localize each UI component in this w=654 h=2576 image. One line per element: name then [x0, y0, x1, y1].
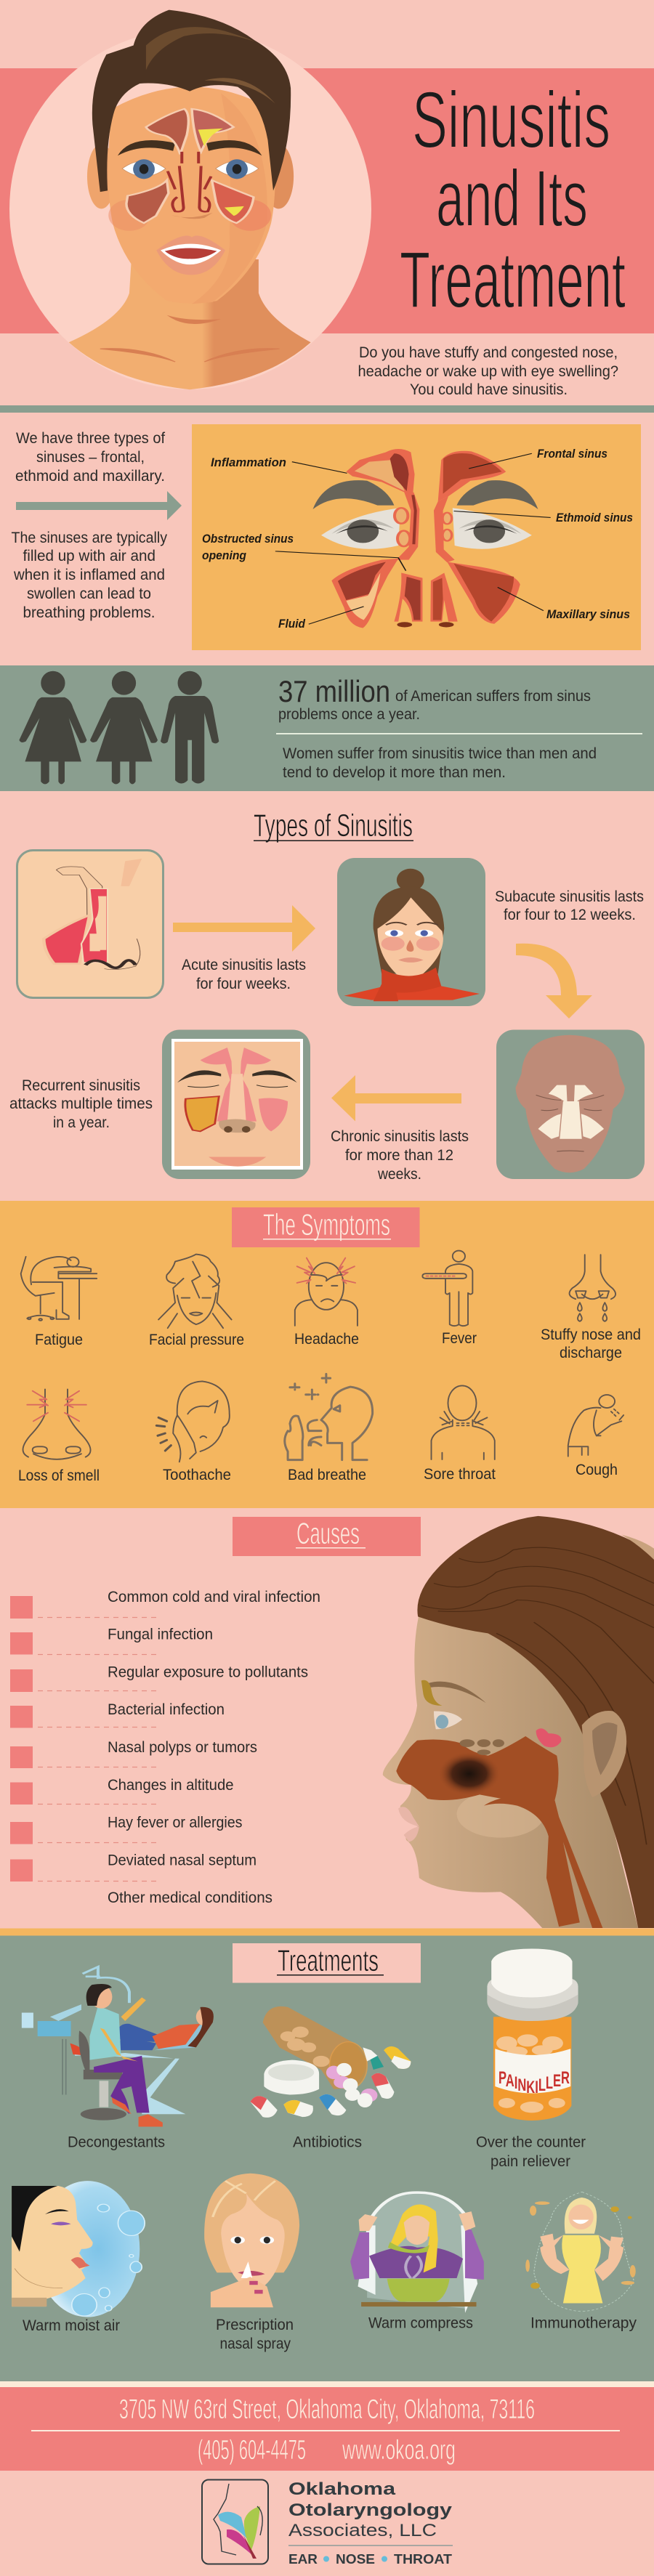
illustration: dental chair scene: [22, 1967, 214, 2126]
sinus passages: [126, 109, 254, 223]
heading: the symptoms: [232, 1207, 420, 1247]
text: acute: Acute sinusitis lasts: [182, 957, 306, 973]
icon: fatigue: [21, 1257, 97, 1321]
text: sinuses filled with air: [12, 530, 167, 621]
illustration: warm moist air: [12, 2181, 145, 2317]
text: chronic: [331, 1128, 469, 1183]
label: treatments row 2: nasal spray: [219, 2336, 291, 2352]
eye whites: [321, 508, 400, 549]
left ethmoid cells: [395, 508, 410, 546]
icon: headache: [295, 1258, 358, 1326]
icon: toothache: [156, 1381, 230, 1462]
nostrils: [397, 622, 412, 627]
mouth: [156, 235, 225, 275]
icon: bad breath: [285, 1374, 373, 1460]
arrow: chronic to recurrent: [331, 1075, 461, 1122]
right ethmoid cells: [443, 513, 452, 541]
icon: cough: [568, 1395, 623, 1457]
label: treatments row 1: Decongestants: [68, 2134, 165, 2150]
text: three types of sinuses: We have three types of: [16, 430, 165, 447]
logo: Oklahoma Otolaryngology Associates: NOSE: [336, 2552, 375, 2567]
heading: types of sinusitis: Types of Sinusitis: [254, 808, 413, 843]
illustration: painkiller bottle: PAINKILLER: [498, 2068, 570, 2097]
logo: Oklahoma Otolaryngology Associates: Associates, LLC: [288, 2521, 437, 2540]
text: recurrent: attacks multiple times: [9, 1095, 153, 1112]
sphenoid sinus: [536, 1728, 561, 1747]
heading: treatments: Treatments: [278, 1943, 379, 1977]
logo: Oklahoma Otolaryngology Associates: THROAT: [394, 2552, 452, 2567]
panel: statistics: [0, 665, 654, 791]
label: treatments row 2: Immunotherapy: [530, 2314, 637, 2332]
intro text: Do you have stuffy and congested nose,: [359, 344, 618, 361]
list: causes dashed leaders: [38, 1617, 156, 1882]
illustration: antibiotics pills: [250, 2006, 411, 2118]
ears: [87, 144, 116, 208]
right maxillary sinus: [447, 562, 520, 624]
panel: contact information: [0, 2387, 654, 2471]
right turbinate: [430, 572, 458, 622]
list: causes text: [108, 1589, 320, 1906]
text: sinuses filled with air: when it is inflamed and: [13, 567, 165, 583]
panel: sinus anatomy diagram: [192, 424, 641, 650]
callout labels: Inflammation: [211, 455, 286, 469]
text: sinuses filled with air: filled up with air and: [23, 548, 156, 564]
text: acute: for four weeks.: [196, 976, 291, 992]
arrow: acute to subacute: [173, 905, 315, 952]
logo: Oklahoma Otolaryngology Associates: Oklahoma: [288, 2479, 396, 2499]
panel: framed face with sinuses: [162, 1030, 310, 1179]
heading: causes: [233, 1516, 421, 1556]
callout labels: Maxillary sinus: [546, 607, 630, 621]
panel: woman with scarf: [337, 858, 485, 1006]
intro text: [358, 344, 618, 398]
text: sinuses filled with air: The sinuses are typically: [12, 530, 167, 546]
list: causes text: Other medical conditions: [108, 1890, 272, 1906]
portrait circle: [9, 29, 371, 389]
eyebrows: [118, 140, 175, 155]
stat text: [278, 674, 591, 723]
anatomy drawing: [275, 449, 551, 628]
right frontal sinus: [438, 451, 506, 501]
illustration: painkiller bottle: [487, 1949, 578, 2121]
callout labels: Fluid: [278, 617, 306, 631]
label: symptoms row 1: [35, 1327, 641, 1361]
callout lines: [275, 453, 551, 624]
label: symptoms row 1: Stuffy nose and: [541, 1327, 641, 1343]
arrow: curved subacute to chronic: [516, 944, 592, 1018]
label: treatments row 2: Warm moist air: [23, 2317, 120, 2334]
text: chronic: for more than 12: [345, 1147, 453, 1164]
stat text: 37 million: [278, 674, 390, 708]
illustration: woman's head profile with airway: [383, 1516, 654, 1928]
stat text: problems once a year.: [278, 706, 420, 723]
label: symptoms row 2: Cough: [576, 1462, 618, 1478]
label: symptoms row 1: discharge: [560, 1345, 622, 1361]
intro text: headache or wake up with eye swelling?: [358, 363, 618, 380]
text: sinuses filled with air: swollen can lead to: [27, 586, 151, 602]
text: three types of sinuses: ethmoid and maxillary.: [15, 468, 165, 485]
label: treatments row 1: pain reliever: [490, 2153, 570, 2170]
text: acute: [182, 957, 306, 992]
illustration: nasal spray: [204, 2174, 299, 2307]
label: symptoms row 2: [18, 1462, 618, 1484]
list: causes text: Hay fever or allergies: [108, 1815, 243, 1831]
airway: [396, 1736, 559, 1806]
logo: Oklahoma Otolaryngology Associates: [202, 2479, 453, 2567]
icon: facial pressure: [158, 1255, 232, 1328]
label: symptoms row 1: Fatigue: [35, 1332, 83, 1348]
logo: Oklahoma Otolaryngology Associates: Otolaryngology: [288, 2500, 453, 2520]
left column: [396, 491, 419, 560]
list: causes text: Regular exposure to pollutants: [108, 1664, 308, 1681]
face: [108, 87, 275, 304]
heading: causes: Causes: [296, 1516, 360, 1550]
text: sinuses filled with air: breathing problems.: [23, 604, 156, 621]
illustration: man's face with sinuses: [69, 10, 311, 389]
stat text: of American suffers from sinus: [395, 688, 591, 705]
intro text: You could have sinusitis.: [410, 381, 568, 398]
right column: [434, 496, 455, 562]
divider strip: [0, 405, 654, 413]
list: causes markers: [10, 1596, 33, 1882]
list: causes text: Bacterial infection: [108, 1701, 225, 1718]
text: recurrent: in a year.: [53, 1114, 110, 1131]
title: [400, 76, 626, 325]
women text: tend to develop it more than men.: [283, 764, 506, 781]
ethmoid cells: [460, 1739, 504, 1755]
callout labels: Obstructed sinus: [202, 532, 294, 546]
callout labels: [202, 447, 633, 631]
label: treatments row 2: [23, 2314, 637, 2352]
list: causes text: Nasal polyps or tumors: [108, 1739, 257, 1756]
lips: [398, 1807, 419, 1842]
text: subacute: for four to 12 weeks.: [504, 907, 636, 923]
brows: [312, 480, 394, 509]
nose: [171, 213, 213, 219]
panel: contact information: www.okoa.org: [342, 2435, 456, 2466]
header band: [0, 68, 654, 333]
logo: Oklahoma Otolaryngology Associates: EAR: [288, 2552, 318, 2567]
label: treatments row 2: Warm compress: [368, 2314, 473, 2332]
women text: [283, 745, 597, 781]
nasal canal: [168, 152, 211, 211]
text: recurrent: Recurrent sinusitis: [22, 1077, 140, 1094]
panel: contact information: (405) 604-4475: [198, 2435, 306, 2466]
label: symptoms row 1: Headache: [294, 1331, 359, 1348]
label: treatments row 1: Over the counter: [476, 2134, 586, 2150]
label: symptoms row 1: Facial pressure: [149, 1332, 244, 1348]
logo mark: [202, 2480, 268, 2564]
text: subacute: Subacute sinusitis lasts: [495, 888, 644, 905]
heading: the symptoms: The Symptoms: [263, 1207, 390, 1242]
icon: fever: [422, 1251, 472, 1326]
panel: acute nose illustration: [17, 850, 163, 998]
panel: bald face: [496, 1030, 645, 1179]
callout labels: Ethmoid sinus: [556, 511, 633, 524]
icon: stuffy nose: [570, 1255, 615, 1321]
eyes: [122, 161, 166, 177]
hair: [92, 10, 291, 192]
ear: [582, 1711, 626, 1797]
list: causes text: Common cold and viral infection: [108, 1589, 320, 1605]
left frontal sinus: [346, 449, 415, 494]
text: chronic: weeks.: [377, 1166, 421, 1183]
illustration: steam tent: [350, 2192, 484, 2313]
divider strip: cream: [0, 2381, 654, 2387]
label: symptoms row 2: Loss of smell: [18, 1467, 100, 1484]
text: three types of sinuses: [15, 430, 165, 485]
text: subacute: [495, 888, 644, 923]
icon: sore throat: [432, 1385, 495, 1459]
label: symptoms row 2: Sore throat: [424, 1466, 496, 1483]
left turbinate: [394, 572, 422, 622]
label: treatments row 1: Antibiotics: [293, 2134, 362, 2150]
callout labels: opening: [202, 548, 247, 562]
face and neck: [383, 1614, 638, 1928]
icon: loss of smell: [23, 1389, 91, 1459]
panel: symptoms: [0, 1201, 654, 1508]
list: causes text: Changes in altitude: [108, 1777, 234, 1794]
label: treatments row 2: Prescription: [216, 2317, 294, 2333]
text: recurrent: [9, 1077, 153, 1131]
jaw highlight: [457, 1791, 544, 1838]
arrow: to diagram: [16, 491, 182, 520]
text: chronic: Chronic sinusitis lasts: [331, 1128, 469, 1145]
neck and shoulders: [69, 259, 311, 389]
women text: Women suffer from sinusitis twice than men and: [283, 745, 597, 762]
brow and eye: [427, 1682, 486, 1703]
heading: treatments: [233, 1943, 421, 1983]
panel: treatments: [0, 1928, 654, 2381]
illustration: immunotherapy: [525, 2192, 636, 2312]
label: symptoms row 1: Fever: [442, 1330, 477, 1347]
icon: two women and a man: [19, 671, 219, 784]
list: causes text: Deviated nasal septum: [108, 1852, 257, 1868]
text: three types of sinuses: sinuses – frontal,: [36, 449, 145, 466]
hair: [417, 1516, 654, 1928]
list: causes text: Fungal infection: [108, 1626, 213, 1643]
label: treatments row 1: [68, 2134, 586, 2170]
label: symptoms row 2: Bad breathe: [288, 1467, 366, 1483]
label: symptoms row 2: Toothache: [163, 1467, 231, 1483]
callout labels: Frontal sinus: [537, 447, 607, 461]
left maxillary sinus: [331, 559, 398, 628]
